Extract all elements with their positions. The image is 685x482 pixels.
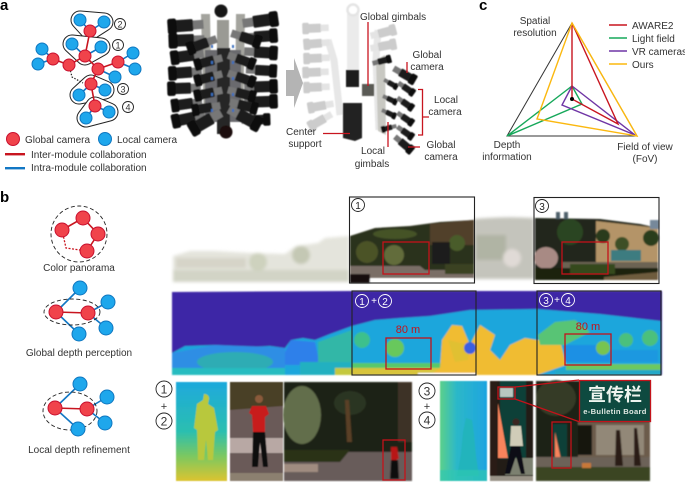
legend: network: Inter-module collaboration	[31, 150, 147, 161]
bottom left view labels	[156, 381, 172, 429]
radar axis labels: information	[482, 152, 532, 163]
bottom left view labels: 2	[161, 414, 168, 428]
rig callouts: gimbals	[355, 159, 389, 170]
module numbers: 4	[125, 102, 131, 112]
diagram: local depth refinement: Local depth refinement	[28, 445, 130, 456]
module numbers: 2	[117, 20, 123, 30]
diagram: color panorama: Color panorama	[43, 263, 115, 274]
radar axis labels: resolution	[513, 28, 557, 39]
radar legend: Ours	[632, 60, 654, 71]
wide photo 2	[536, 380, 650, 481]
inner lenses	[193, 52, 224, 71]
view frames	[350, 197, 474, 283]
depth crop 2	[440, 381, 487, 481]
red detail boxes	[383, 242, 429, 274]
person photo close-up 1	[230, 382, 283, 481]
depth panorama	[172, 291, 662, 376]
central block	[346, 70, 359, 87]
rig callouts: camera	[424, 152, 458, 163]
depth red boxes	[386, 338, 431, 369]
radar axis labels: (FoV)	[632, 154, 658, 165]
distance labels: 80 m	[396, 324, 420, 336]
callout: bulletin board sign: 宣传栏	[588, 385, 642, 405]
module numbers	[112, 18, 134, 112]
depth frames	[352, 291, 476, 375]
rig callouts: Local	[361, 146, 385, 157]
depth view numbers: 3	[543, 296, 549, 307]
person photo 2	[490, 381, 533, 481]
rig callouts: Global gimbals	[360, 12, 426, 23]
radar axis labels: Field of view	[617, 142, 674, 153]
faded panorama	[173, 217, 534, 282]
global cameras	[47, 25, 124, 112]
legend: network	[5, 132, 177, 174]
left outer lenses	[167, 16, 204, 35]
dark lenses	[372, 54, 392, 67]
right bracket	[376, 55, 386, 135]
center support	[343, 103, 362, 141]
legend: network: Intra-module collaboration	[31, 163, 147, 174]
arrow: exploded view	[286, 58, 303, 108]
bottom right view labels: 4	[424, 414, 431, 428]
distance labels	[396, 321, 600, 336]
rig callouts	[286, 12, 462, 170]
view 1 photo	[350, 220, 474, 283]
callout: bulletin board sign	[580, 380, 650, 422]
wide photo 1	[283, 382, 412, 481]
distance labels: 80 m	[576, 321, 600, 333]
module numbers: 1	[115, 40, 121, 50]
rig callouts: Global	[427, 140, 455, 151]
dotted link	[69, 65, 83, 83]
depth view numbers: +	[554, 295, 560, 306]
depth view numbers: 4	[565, 296, 571, 307]
red person box 2	[552, 422, 571, 468]
module outlines	[72, 20, 109, 118]
rig callouts: camera	[428, 107, 462, 118]
red person box 1	[383, 440, 405, 480]
bottom right view labels: 3	[424, 384, 431, 398]
ghost gimbals and lenses	[302, 4, 398, 132]
big lower and upper lenses	[186, 106, 225, 138]
view numbers: 1	[355, 201, 361, 212]
red sign box	[498, 387, 515, 399]
diagram: color panorama	[43, 206, 115, 274]
panel a: camera network diagram	[32, 14, 141, 124]
bottom right view labels	[419, 383, 435, 428]
right outer lenses	[242, 11, 279, 31]
zoom lines	[515, 380, 580, 422]
local cameras	[32, 14, 141, 124]
diagram: global depth perception: Global depth perception	[26, 348, 132, 359]
view 3 photo	[534, 212, 659, 280]
rig callouts: support	[288, 139, 322, 150]
depth view numbers: +	[371, 296, 377, 307]
radar legend	[609, 21, 685, 71]
exploded rig	[302, 4, 418, 155]
radar legend: AWARE2	[632, 21, 674, 32]
radar axis labels: Spatial	[520, 16, 550, 27]
module numbers: 3	[120, 84, 126, 94]
rig callouts: Center	[286, 127, 317, 138]
panel c: radar triangle chart	[507, 23, 637, 136]
panel label b: b	[0, 189, 9, 206]
rig callouts: Local	[434, 95, 458, 106]
diagram: local depth refinement	[28, 377, 130, 456]
rig callouts: camera	[410, 62, 444, 73]
radar axis labels	[482, 16, 674, 165]
depth view numbers	[356, 294, 574, 308]
view numbers	[352, 198, 548, 213]
rig callouts: Global	[413, 50, 441, 61]
depth view numbers: 2	[382, 297, 388, 308]
bottom left view labels: +	[161, 401, 167, 413]
camera array rig	[167, 4, 279, 138]
depth view numbers: 1	[359, 297, 365, 308]
color panorama image	[173, 197, 659, 284]
callout: bulletin board sign: e-Bulletin Board	[583, 407, 647, 416]
legend: network: Local camera	[117, 135, 177, 146]
view numbers: 3	[539, 202, 545, 213]
diagram: global depth perception	[26, 281, 132, 359]
depth crop 1	[176, 382, 227, 481]
radar axis labels: Depth	[494, 140, 520, 151]
intra-module links	[38, 20, 135, 118]
bottom right view labels: +	[424, 401, 430, 413]
bottom left view labels: 1	[161, 382, 168, 396]
inter-module links	[53, 31, 118, 106]
legend: network: Global camera	[25, 135, 90, 146]
radar legend: Light field	[632, 34, 675, 45]
